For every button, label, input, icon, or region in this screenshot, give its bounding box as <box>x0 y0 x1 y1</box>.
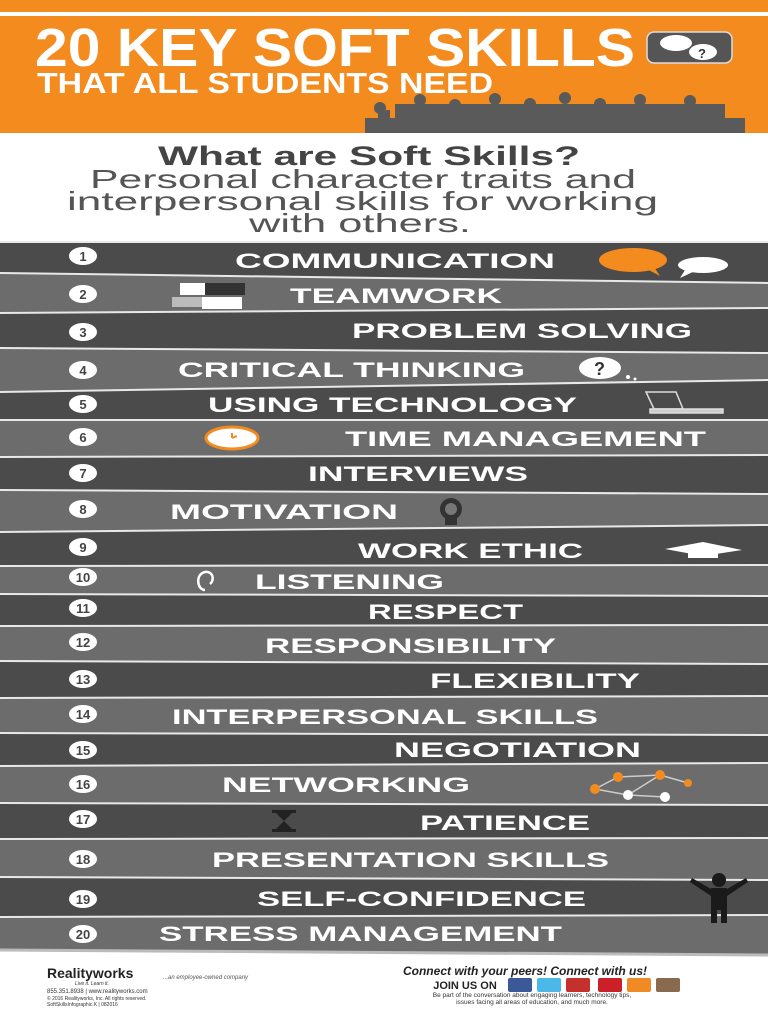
intro: what are soft skills: with others. <box>247 208 471 238</box>
number badges: 1 <box>79 249 87 264</box>
footer: company info: Live it. Learn it. <box>75 981 109 987</box>
number badges: 7 <box>79 466 87 481</box>
footer: social connect: Be part of the conversation about engaging learners, technology tips, <box>433 992 631 999</box>
skills list bands <box>0 242 768 955</box>
footer: social connect: JOIN US ON <box>433 980 497 992</box>
number badges: 19 <box>76 892 90 907</box>
header banner <box>0 0 768 133</box>
skill labels: PATIENCE <box>420 812 590 835</box>
skill labels: TIME MANAGEMENT <box>345 428 706 451</box>
number badges: 5 <box>79 397 87 412</box>
icon: graduation cap <box>665 542 742 558</box>
number badges: 15 <box>76 743 90 758</box>
footer: company info: SoftSkillsInfographic.K | 082016 <box>47 1002 118 1008</box>
skill labels: PROBLEM SOLVING <box>352 320 692 343</box>
icon: thought bubble question <box>579 357 636 380</box>
intro: what are soft skills <box>67 141 658 238</box>
footer: social connect <box>403 964 680 1006</box>
icon: chat bubbles <box>647 32 732 63</box>
skill labels: INTERVIEWS <box>308 463 528 486</box>
number badges: 13 <box>76 672 90 687</box>
footer: social connect: Connect with your peers! Connect with us! <box>403 964 647 978</box>
number badges: 20 <box>76 927 90 942</box>
skill labels: NETWORKING <box>222 774 470 797</box>
skill labels: SELF-CONFIDENCE <box>257 888 586 911</box>
subtitle: THAT ALL STUDENTS NEED <box>37 68 493 100</box>
number badges: 6 <box>79 430 87 445</box>
skill labels: PRESENTATION SKILLS <box>212 849 609 872</box>
icon: hourglass <box>272 810 296 832</box>
skill labels: STRESS MANAGEMENT <box>159 923 562 946</box>
intro: what are soft skills: interpersonal skills for working <box>67 186 658 216</box>
footer: company info <box>47 965 249 1008</box>
number badges: 16 <box>76 777 90 792</box>
number badges <box>69 247 97 943</box>
skill labels: INTERPERSONAL SKILLS <box>172 706 598 729</box>
number badges: 17 <box>76 812 90 827</box>
footer: company info: Realityworks <box>47 965 134 981</box>
skill labels: RESPECT <box>368 601 523 624</box>
skill labels: RESPONSIBILITY <box>265 635 556 658</box>
number badges: 18 <box>76 852 90 867</box>
footer: company info: ...an employee-owned company <box>163 975 249 981</box>
icon: award badge <box>440 498 462 525</box>
number badges: 2 <box>79 287 87 302</box>
icon: speech bubbles <box>599 248 728 278</box>
skill labels <box>159 250 706 946</box>
number badges: 14 <box>76 707 91 722</box>
number badges: 4 <box>79 363 87 378</box>
number badges: 8 <box>79 502 87 517</box>
icon: clock <box>206 427 258 449</box>
intro: what are soft skills: Personal character traits and <box>90 164 636 194</box>
icon: laptop <box>646 392 723 413</box>
number badges: 9 <box>79 540 87 555</box>
intro: what are soft skills: What are Soft Skills? <box>158 141 580 171</box>
footer: social connect: issues facing all areas of education, and much more. <box>456 999 608 1006</box>
silhouettes of meeting <box>365 92 745 133</box>
icon: network <box>590 770 692 802</box>
title: 20 KEY SOFT SKILLS <box>35 18 635 78</box>
skill labels: MOTIVATION <box>170 501 398 524</box>
skill labels: NEGOTIATION <box>394 739 641 762</box>
skill labels: LISTENING <box>255 571 444 594</box>
skill labels: USING TECHNOLOGY <box>208 394 577 417</box>
number badges: 10 <box>76 570 90 585</box>
skill labels: WORK ETHIC <box>358 540 583 563</box>
icon: chat bubbles: ? <box>698 46 706 61</box>
skill labels: TEAMWORK <box>290 285 502 308</box>
footer: company info: 855.351.8938 | www.realityworks.com <box>47 989 148 995</box>
icon: ear <box>198 572 213 590</box>
number badges: 12 <box>76 635 90 650</box>
skill labels: CRITICAL THINKING <box>178 359 525 382</box>
icon: puzzle <box>172 283 245 309</box>
skill labels: FLEXIBILITY <box>430 670 640 693</box>
number badges: 11 <box>76 601 90 616</box>
number badges: 3 <box>79 325 87 340</box>
skill labels: COMMUNICATION <box>235 250 555 273</box>
icon: thought bubble question: ? <box>594 359 605 379</box>
icon: person arms up <box>690 873 748 923</box>
footer: company info: © 2016 Realityworks, Inc. All rights reserved. <box>47 995 146 1002</box>
